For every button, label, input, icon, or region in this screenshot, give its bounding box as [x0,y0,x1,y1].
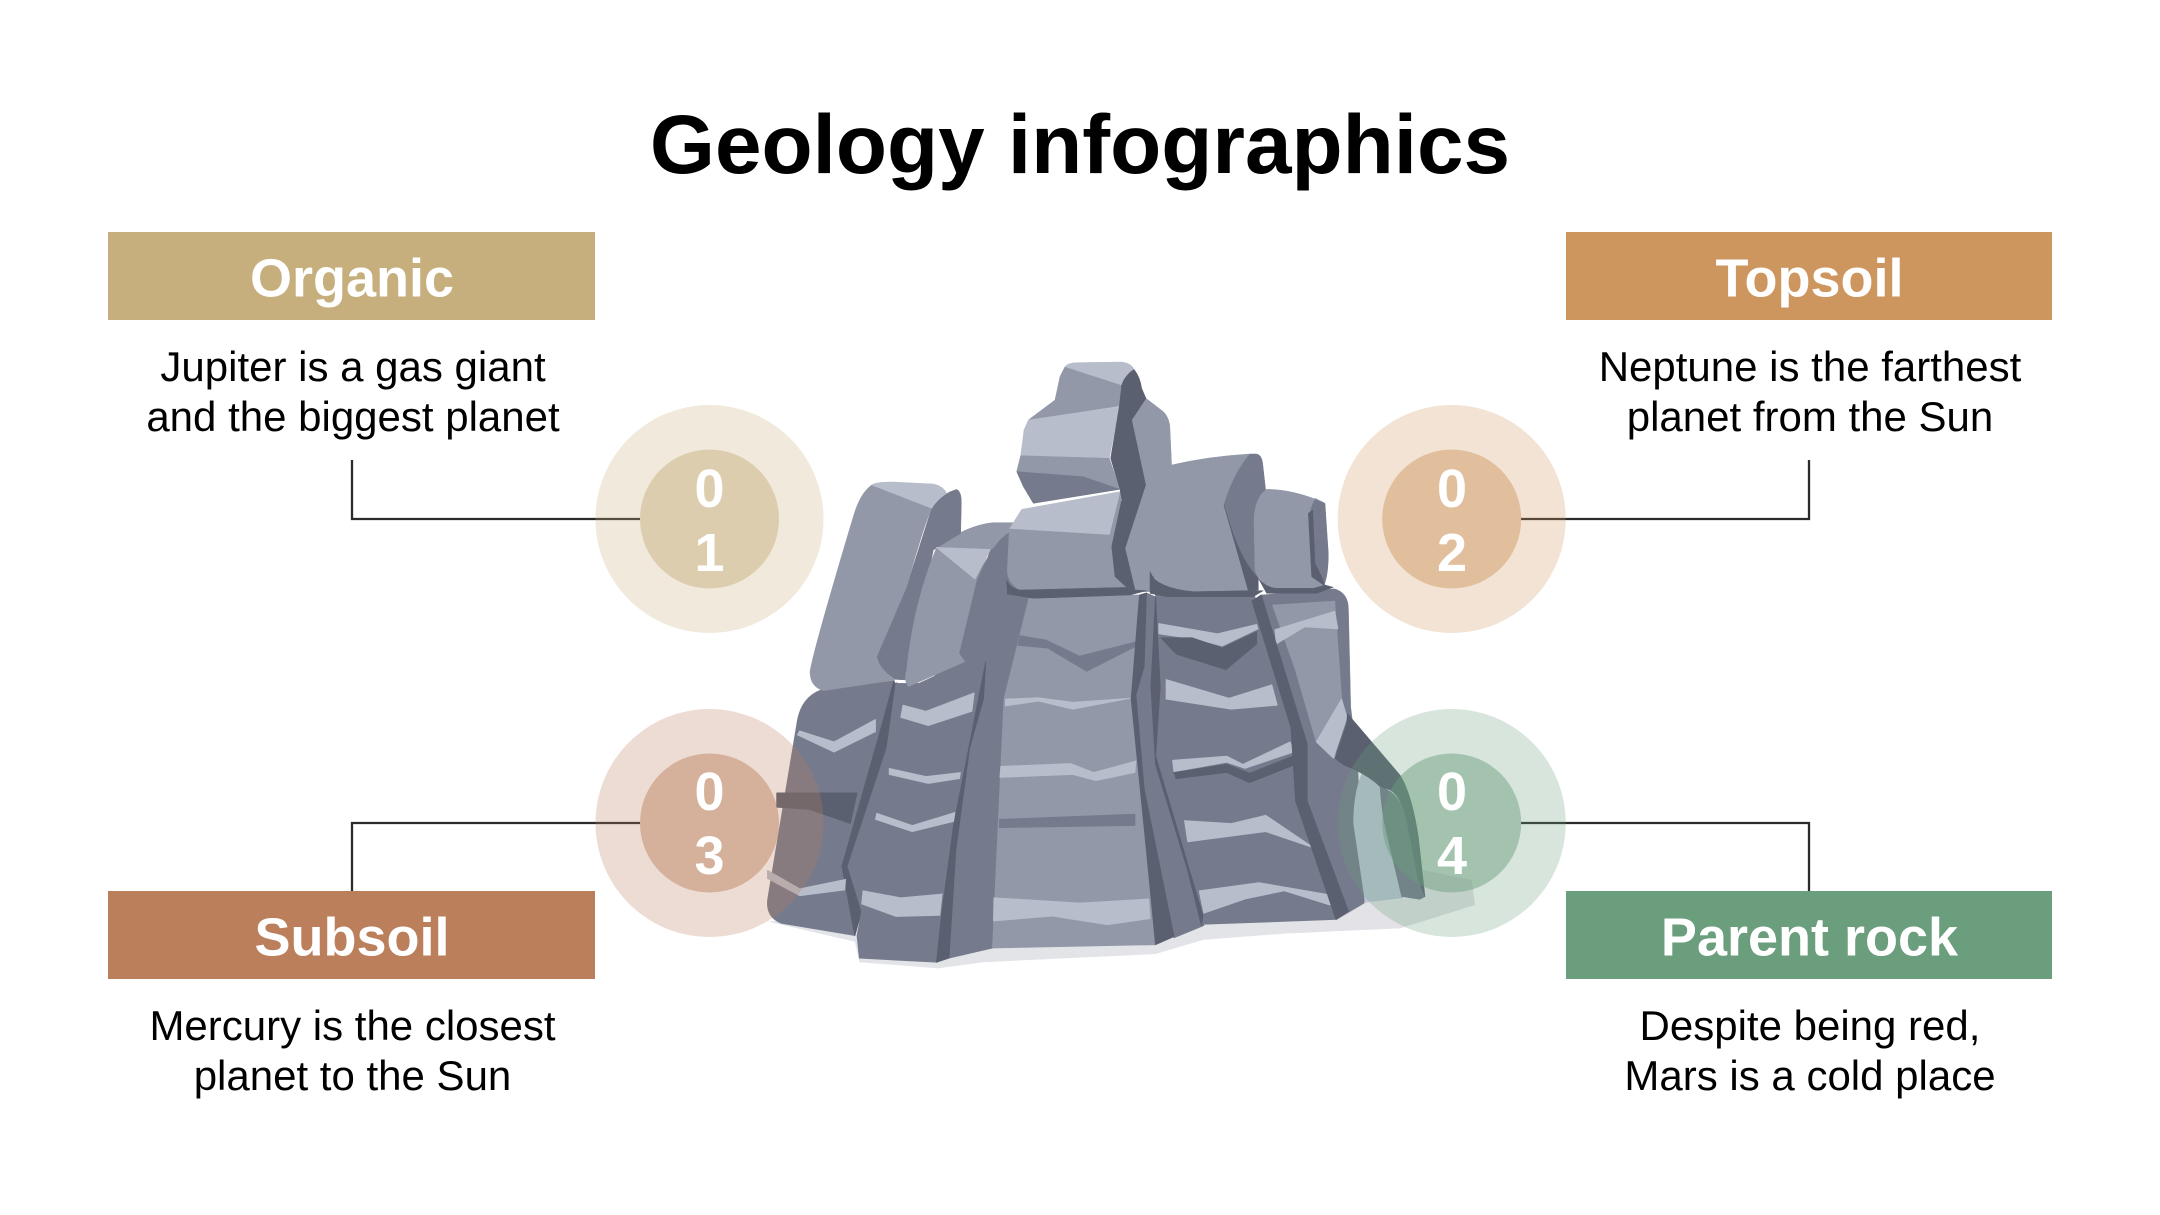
organic description: Jupiter is a gas giant [160,343,546,390]
title: Geology infographics [650,97,1510,191]
subsoil heading: Subsoil [254,908,450,968]
topsoil description: planet from the Sun [1627,393,1993,440]
subsoil connector [352,823,640,891]
parent rock description: Mars is a cold place [1624,1052,1996,1099]
parent rock heading: Parent rock [1661,908,1959,968]
organic number badge: 1 [694,523,725,583]
topsoil connector [1521,460,1809,519]
parent rock connector [1521,823,1809,891]
organic heading: Organic [250,248,454,308]
organic number badge: 0 [694,459,725,519]
organic connector [352,460,640,519]
subsoil number badge [596,709,824,937]
topsoil number badge: 0 [1437,459,1467,519]
subsoil heading bar [108,891,595,979]
subsoil number badge: 3 [694,826,725,886]
parent rock heading bar [1566,891,2052,979]
rock base fill behind left blocks [893,533,1027,737]
panel: topsoil [1338,232,2052,633]
parent rock description: Despite being red, [1640,1002,1980,1049]
topsoil heading bar [1566,232,2052,320]
rock ground shadow [768,911,1360,968]
panel: organic [108,232,824,633]
rock top pillar and right blocks [1007,362,1333,598]
topsoil heading: Topsoil [1716,248,1903,308]
organic number badge [596,405,824,633]
subsoil description: Mercury is the closest [149,1002,556,1049]
rock right leg [1335,713,1425,903]
rock ground shadow right [1290,870,1475,933]
organic heading bar [108,232,595,320]
parent rock number badge [1338,709,1566,937]
topsoil description: Neptune is the farthest [1599,343,2022,390]
organic description: and the biggest planet [146,393,560,440]
rock left slabs [810,482,1023,691]
parent rock number badge: 4 [1437,826,1467,886]
parent rock number badge: 0 [1437,762,1467,822]
panel: subsoil [108,709,824,1099]
subsoil description: planet to the Sun [194,1052,511,1099]
illustration: layered rock formation [767,362,1475,968]
subsoil number badge: 0 [694,762,725,822]
topsoil number badge: 2 [1437,523,1467,583]
panel: parent rock [1338,709,2052,1099]
rock lower strata [767,532,1365,962]
topsoil number badge [1338,405,1566,633]
